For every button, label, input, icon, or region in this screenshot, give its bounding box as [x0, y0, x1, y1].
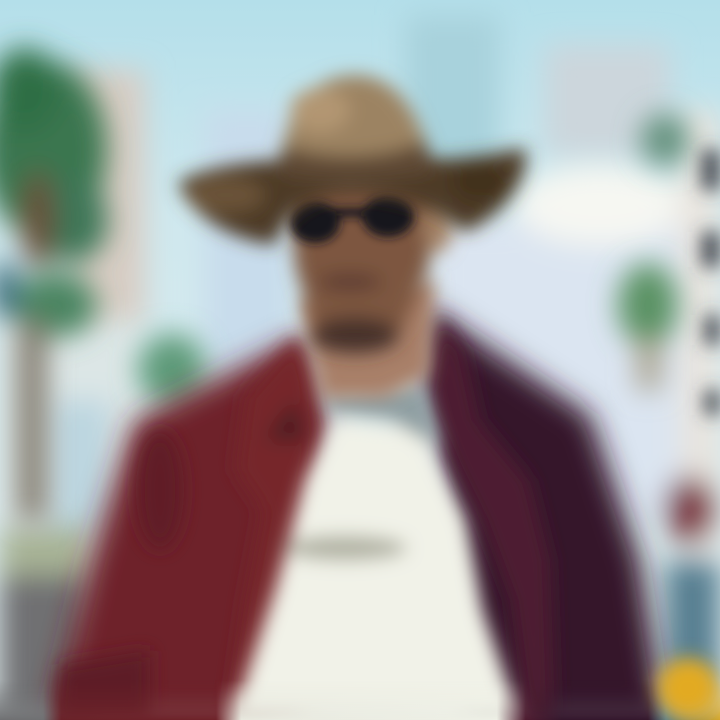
face: [285, 170, 452, 353]
bottom edge colour strip: [0, 680, 720, 720]
shirt: [232, 385, 520, 720]
neck: [300, 280, 435, 398]
sunglasses: [290, 195, 414, 243]
cowboy hat: [178, 75, 526, 245]
jacket: [50, 305, 665, 720]
figure: man: [50, 75, 665, 720]
jacket lapels: [55, 315, 555, 720]
yellow spot: [657, 658, 719, 718]
